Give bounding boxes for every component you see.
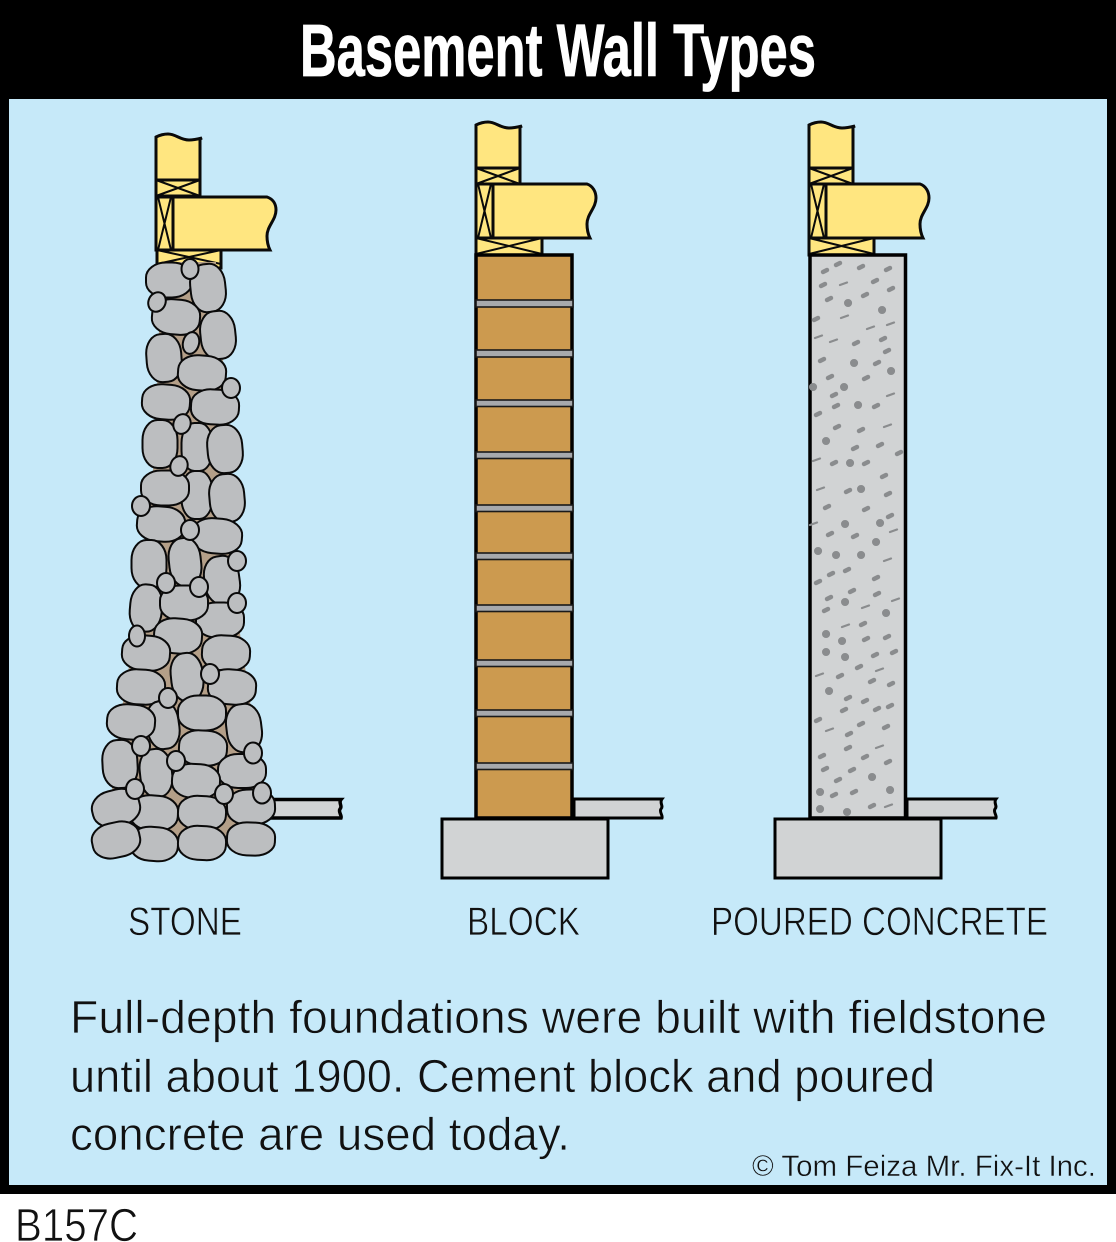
aggregate speckles	[810, 263, 901, 812]
stone wall illustration	[88, 134, 341, 863]
body text: Full-depth foundations were built with fieldstone	[70, 991, 1047, 1043]
title: Basement Wall Types	[300, 9, 816, 92]
floor slab at block wall	[574, 799, 662, 818]
label: poured concrete: POURED CONCRETE	[711, 900, 1048, 944]
block wall illustration	[442, 122, 662, 878]
body text	[70, 991, 1047, 1160]
body text: concrete are used today.	[70, 1108, 570, 1160]
label: stone: STONE	[128, 900, 242, 944]
body text: until about 1900. Cement block and poured	[70, 1050, 935, 1102]
small chinking stones	[126, 259, 271, 804]
poured concrete wall illustration	[775, 122, 996, 878]
mortar joints	[476, 300, 573, 770]
framing at block wall	[476, 122, 596, 255]
concrete block courses	[476, 255, 572, 818]
floor slab at stone wall	[262, 800, 341, 818]
footing under concrete wall	[775, 819, 941, 878]
copyright: © Tom Feiza Mr. Fix-It Inc.	[752, 1150, 1096, 1183]
footing under block wall	[442, 819, 608, 878]
framing at stone wall	[156, 134, 276, 268]
floor slab at concrete wall	[907, 799, 996, 818]
concrete wall body	[810, 255, 906, 818]
framing at concrete wall	[809, 122, 929, 255]
label: block: BLOCK	[467, 900, 580, 944]
mortar fill	[105, 262, 265, 850]
large stones	[88, 262, 276, 863]
